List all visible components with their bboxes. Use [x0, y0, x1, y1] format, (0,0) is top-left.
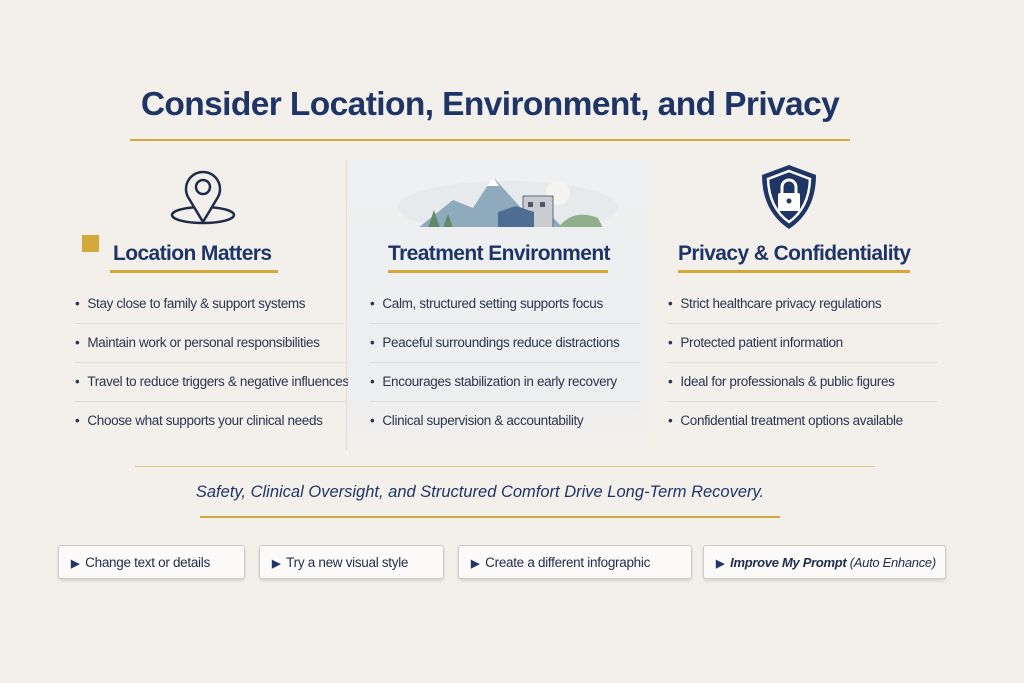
panel: location	[75, 170, 349, 428]
icon: landscape	[419, 177, 602, 227]
bullet list: Clinical supervision & accountability	[382, 413, 583, 428]
button: different infographic: ▶ Create a different infographic	[471, 555, 650, 570]
bullet list: Choose what supports your clinical needs	[87, 413, 323, 428]
bullet list: Maintain work or personal responsibilities	[87, 335, 320, 350]
bullet list	[370, 296, 640, 428]
panel: environment	[348, 160, 648, 450]
bullet list: Stay close to family & support systems	[87, 296, 305, 311]
bullet list	[668, 296, 938, 428]
panel: privacy	[668, 165, 938, 428]
button: improve prompt: ▶ Improve My Prompt (Auto Enhance)	[716, 555, 936, 570]
title: Consider Location, Environment, and Privacy	[141, 86, 839, 123]
bullet list: Ideal for professionals & public figures	[680, 374, 895, 389]
icon: location pin	[170, 170, 236, 224]
bullet list: Strict healthcare privacy regulations	[680, 296, 881, 311]
bullet list: Encourages stabilization in early recovery	[382, 374, 617, 389]
bullet list: Peaceful surroundings reduce distractions	[382, 335, 619, 350]
bullet list: Protected patient information	[680, 335, 843, 350]
bullet list	[75, 296, 349, 428]
button: improve prompt	[703, 545, 946, 579]
heading: Location Matters	[113, 242, 271, 265]
button: visual style	[259, 545, 444, 579]
tagline: Safety, Clinical Oversight, and Structured Comfort Drive Long-Term Recovery.	[196, 483, 764, 501]
bullet list: Calm, structured setting supports focus	[382, 296, 603, 311]
button: change text: ▶ Change text or details	[71, 555, 210, 570]
button: different infographic	[458, 545, 692, 579]
icon: shield lock	[762, 165, 816, 229]
bullet list: Travel to reduce triggers & negative influences	[87, 374, 349, 389]
heading: Treatment Environment	[388, 242, 610, 265]
button: change text	[58, 545, 245, 579]
button: visual style: ▶ Try a new visual style	[272, 555, 408, 570]
bullet list: Confidential treatment options available	[680, 413, 903, 428]
heading: Privacy & Confidentiality	[678, 242, 910, 265]
gold square marker	[82, 235, 99, 252]
